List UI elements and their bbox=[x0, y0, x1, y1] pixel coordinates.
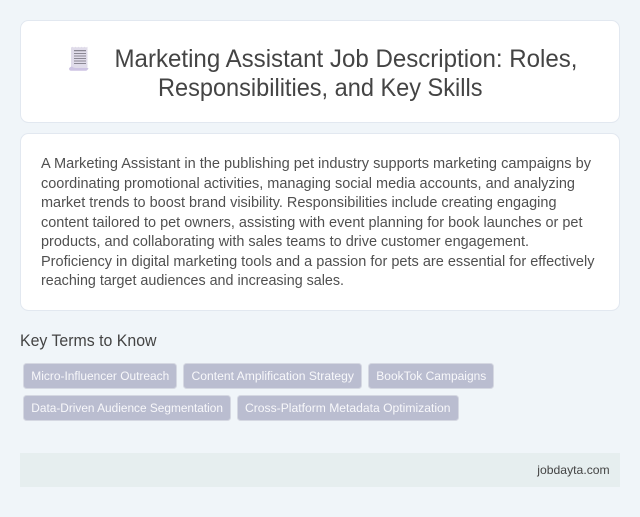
footer bar bbox=[20, 453, 620, 487]
description text: A Marketing Assistant in the publishing pet industry supports marketing campaigns by bbox=[41, 156, 592, 172]
chip: cross-platform metadata optimization: Cross-Platform Metadata Optimization bbox=[245, 401, 451, 415]
description text: coordinating promotional activities, managing social media accounts, and analyzing bbox=[41, 176, 575, 192]
chip: content amplification strategy bbox=[184, 364, 362, 388]
chip: content amplification strategy: Content Amplification Strategy bbox=[192, 369, 355, 383]
title text: Responsibilities, and Key Skills bbox=[158, 74, 482, 102]
description text: content tailored to pet owners, assisting with event planning for book launches or pet bbox=[41, 215, 582, 231]
chip: micro-influencer outreach: Micro-Influencer Outreach bbox=[31, 369, 169, 383]
chip: micro-influencer outreach bbox=[24, 364, 176, 388]
title text bbox=[114, 45, 578, 102]
description text bbox=[41, 156, 595, 289]
footer bar: jobdayta.com bbox=[536, 463, 610, 477]
title text: Marketing Assistant Job Description: Roles, bbox=[114, 45, 578, 73]
chip: data-driven audience segmentation: Data-Driven Audience Segmentation bbox=[31, 401, 223, 415]
panel: title card bbox=[20, 20, 620, 122]
description text: Proficiency in digital marketing tools and a passion for pets are essential for effectively bbox=[41, 254, 595, 270]
heading: key terms: Key Terms to Know bbox=[20, 332, 157, 350]
chip: cross-platform metadata optimization bbox=[238, 396, 458, 420]
panel: description bbox=[20, 134, 620, 310]
description text: market trends to boost brand visibility. Responsibilities include creating engaging bbox=[41, 195, 556, 211]
chip: booktok campaigns bbox=[368, 364, 494, 388]
chip: data-driven audience segmentation bbox=[24, 396, 230, 420]
description text: reaching target audiences and increasing sales. bbox=[41, 273, 344, 289]
chip: booktok campaigns: BookTok Campaigns bbox=[376, 369, 486, 383]
key term chips bbox=[24, 364, 494, 420]
description text: products, and collaborating with sales teams to drive customer engagement. bbox=[41, 234, 529, 250]
icon: document scroll bbox=[69, 47, 88, 71]
